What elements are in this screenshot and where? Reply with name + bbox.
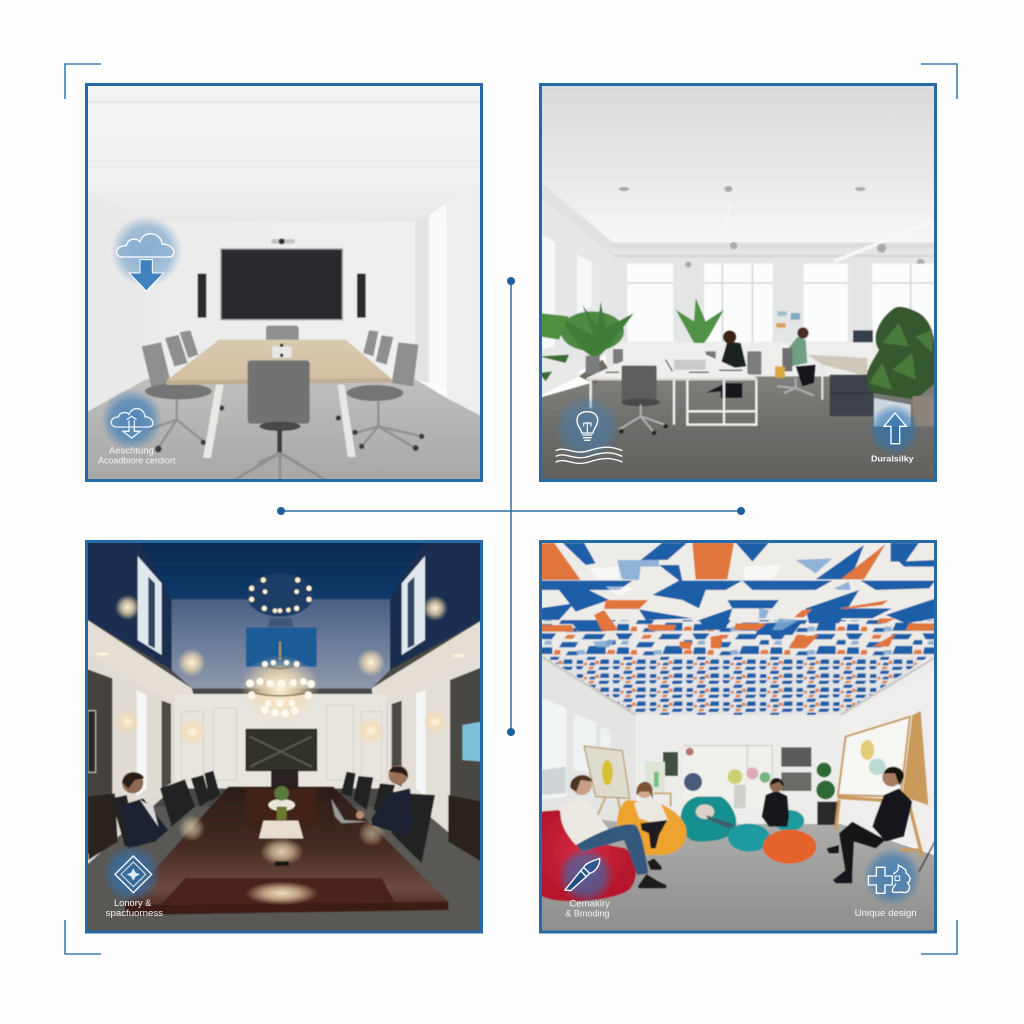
wall screen xyxy=(246,729,317,787)
icon: light bulb over waves xyxy=(555,395,622,463)
left cabinet xyxy=(544,372,579,394)
white desks xyxy=(586,354,757,425)
concrete floor xyxy=(539,376,939,483)
frame xyxy=(86,542,482,932)
panel: minimalist white meeting room xyxy=(85,83,485,483)
right desk xyxy=(807,330,874,416)
person reclining on teal bean bag xyxy=(696,804,736,828)
conference camera xyxy=(271,238,295,244)
bean bags xyxy=(539,797,816,901)
studio photo scene xyxy=(539,540,939,940)
wall sconces xyxy=(115,595,448,746)
frame xyxy=(540,84,936,480)
back wall xyxy=(147,221,418,380)
chairs xyxy=(111,771,435,863)
reflected blue screen xyxy=(246,627,317,667)
right plant and pots xyxy=(867,307,936,426)
white moulding right xyxy=(372,618,485,703)
polished boardroom table xyxy=(125,787,448,915)
sideboards xyxy=(88,793,482,862)
right wall xyxy=(387,652,485,860)
label: acoustic comfort: Aeschtung xyxy=(109,446,154,456)
panel: creative studio with patterned ceiling xyxy=(539,540,939,940)
label: durability: Duralsilky xyxy=(871,454,914,464)
person on red bean bag xyxy=(560,775,666,888)
icon: paint brush xyxy=(557,847,614,903)
white ceiling xyxy=(539,83,939,250)
concrete floor xyxy=(539,812,939,940)
table legs xyxy=(203,385,356,458)
front chair xyxy=(235,360,325,481)
man on right xyxy=(331,765,413,837)
icon: cloud with download arrow xyxy=(111,216,182,291)
room photo scene xyxy=(85,83,485,483)
lower chandelier xyxy=(240,642,320,722)
rear windows xyxy=(627,264,934,342)
label: creativity and branding: Cemakiry xyxy=(569,899,611,909)
wooden table top xyxy=(167,340,391,385)
glossy left wall xyxy=(85,540,172,670)
panel: luxury glossy-ceiling boardroom xyxy=(85,540,485,940)
panel: bright open-plan office xyxy=(539,83,939,483)
wall screen xyxy=(221,249,342,320)
corner bracket: bottom left xyxy=(65,920,101,954)
icon: puzzle pieces xyxy=(863,847,922,906)
table edge xyxy=(125,902,448,915)
icon: diamond emblem xyxy=(102,845,161,903)
label: luxury and spaciousness: Lonory & xyxy=(114,898,151,908)
icon: up arrow xyxy=(870,404,918,454)
person on yellow bean bag xyxy=(634,782,668,848)
patterned ceiling xyxy=(539,540,939,715)
person in green shirt xyxy=(775,327,816,396)
corner bracket: top left xyxy=(65,64,101,99)
man on left xyxy=(122,772,168,848)
label: creativity and branding xyxy=(565,899,611,919)
dark base xyxy=(85,540,485,940)
side walls and column xyxy=(88,204,480,415)
large ceiling shapes xyxy=(539,543,936,635)
seated person in black xyxy=(762,778,789,827)
left windows xyxy=(539,697,610,800)
label: luxury and spaciousness: spacfuorness xyxy=(106,908,164,918)
base walls xyxy=(539,650,939,855)
lower wall xyxy=(614,342,878,376)
label: creativity and branding: & Bmoding xyxy=(565,909,609,919)
wall art board xyxy=(645,746,811,809)
ceiling edge trim xyxy=(539,655,939,715)
white moulding left xyxy=(85,618,193,705)
office photo scene xyxy=(539,83,939,483)
label: unique design: Unique design xyxy=(855,908,917,918)
wall decor xyxy=(776,311,800,328)
dark floor xyxy=(85,807,485,940)
central cross connector xyxy=(277,277,745,736)
reflected back wall xyxy=(172,599,390,688)
speakers xyxy=(198,274,366,318)
person at easel xyxy=(826,767,912,883)
corner bracket: top right xyxy=(921,64,957,99)
back wall panels xyxy=(175,694,387,788)
dense ceiling tiles xyxy=(546,657,929,715)
flowers and mat xyxy=(259,786,303,866)
boardroom photo scene xyxy=(85,540,485,940)
office chair xyxy=(619,366,668,435)
table reflections xyxy=(162,788,395,905)
frame xyxy=(86,84,482,480)
chairs behind desks xyxy=(586,349,761,375)
left wall with windows xyxy=(542,208,614,371)
ceiling beams and lighting xyxy=(539,181,939,268)
rear wall xyxy=(606,242,939,379)
reflected windows xyxy=(138,556,425,655)
upper reflected chandelier xyxy=(247,573,313,627)
ceiling xyxy=(85,83,485,226)
right easel with canvas xyxy=(836,711,928,857)
floor stand pole xyxy=(919,840,936,872)
left plants xyxy=(539,301,634,385)
rear plant xyxy=(676,298,724,343)
frame xyxy=(540,542,936,932)
person at laptop xyxy=(706,330,746,398)
plant xyxy=(816,763,837,825)
icon: cloud with two-way arrow xyxy=(101,389,162,450)
label: luxury and spaciousness xyxy=(106,898,164,918)
left easel xyxy=(584,746,671,823)
left wall xyxy=(85,653,175,867)
carpet floor xyxy=(85,379,485,483)
label: acoustic comfort: Acoadbiore cerdiort xyxy=(98,456,176,466)
chairs behind table xyxy=(142,326,418,388)
recessed lights xyxy=(96,652,466,657)
glossy right wall xyxy=(390,540,485,670)
glossy navy ceiling xyxy=(85,540,485,600)
label: acoustic comfort xyxy=(98,447,176,464)
chair seats and bases xyxy=(145,383,424,452)
corner bracket: bottom right xyxy=(921,920,957,954)
